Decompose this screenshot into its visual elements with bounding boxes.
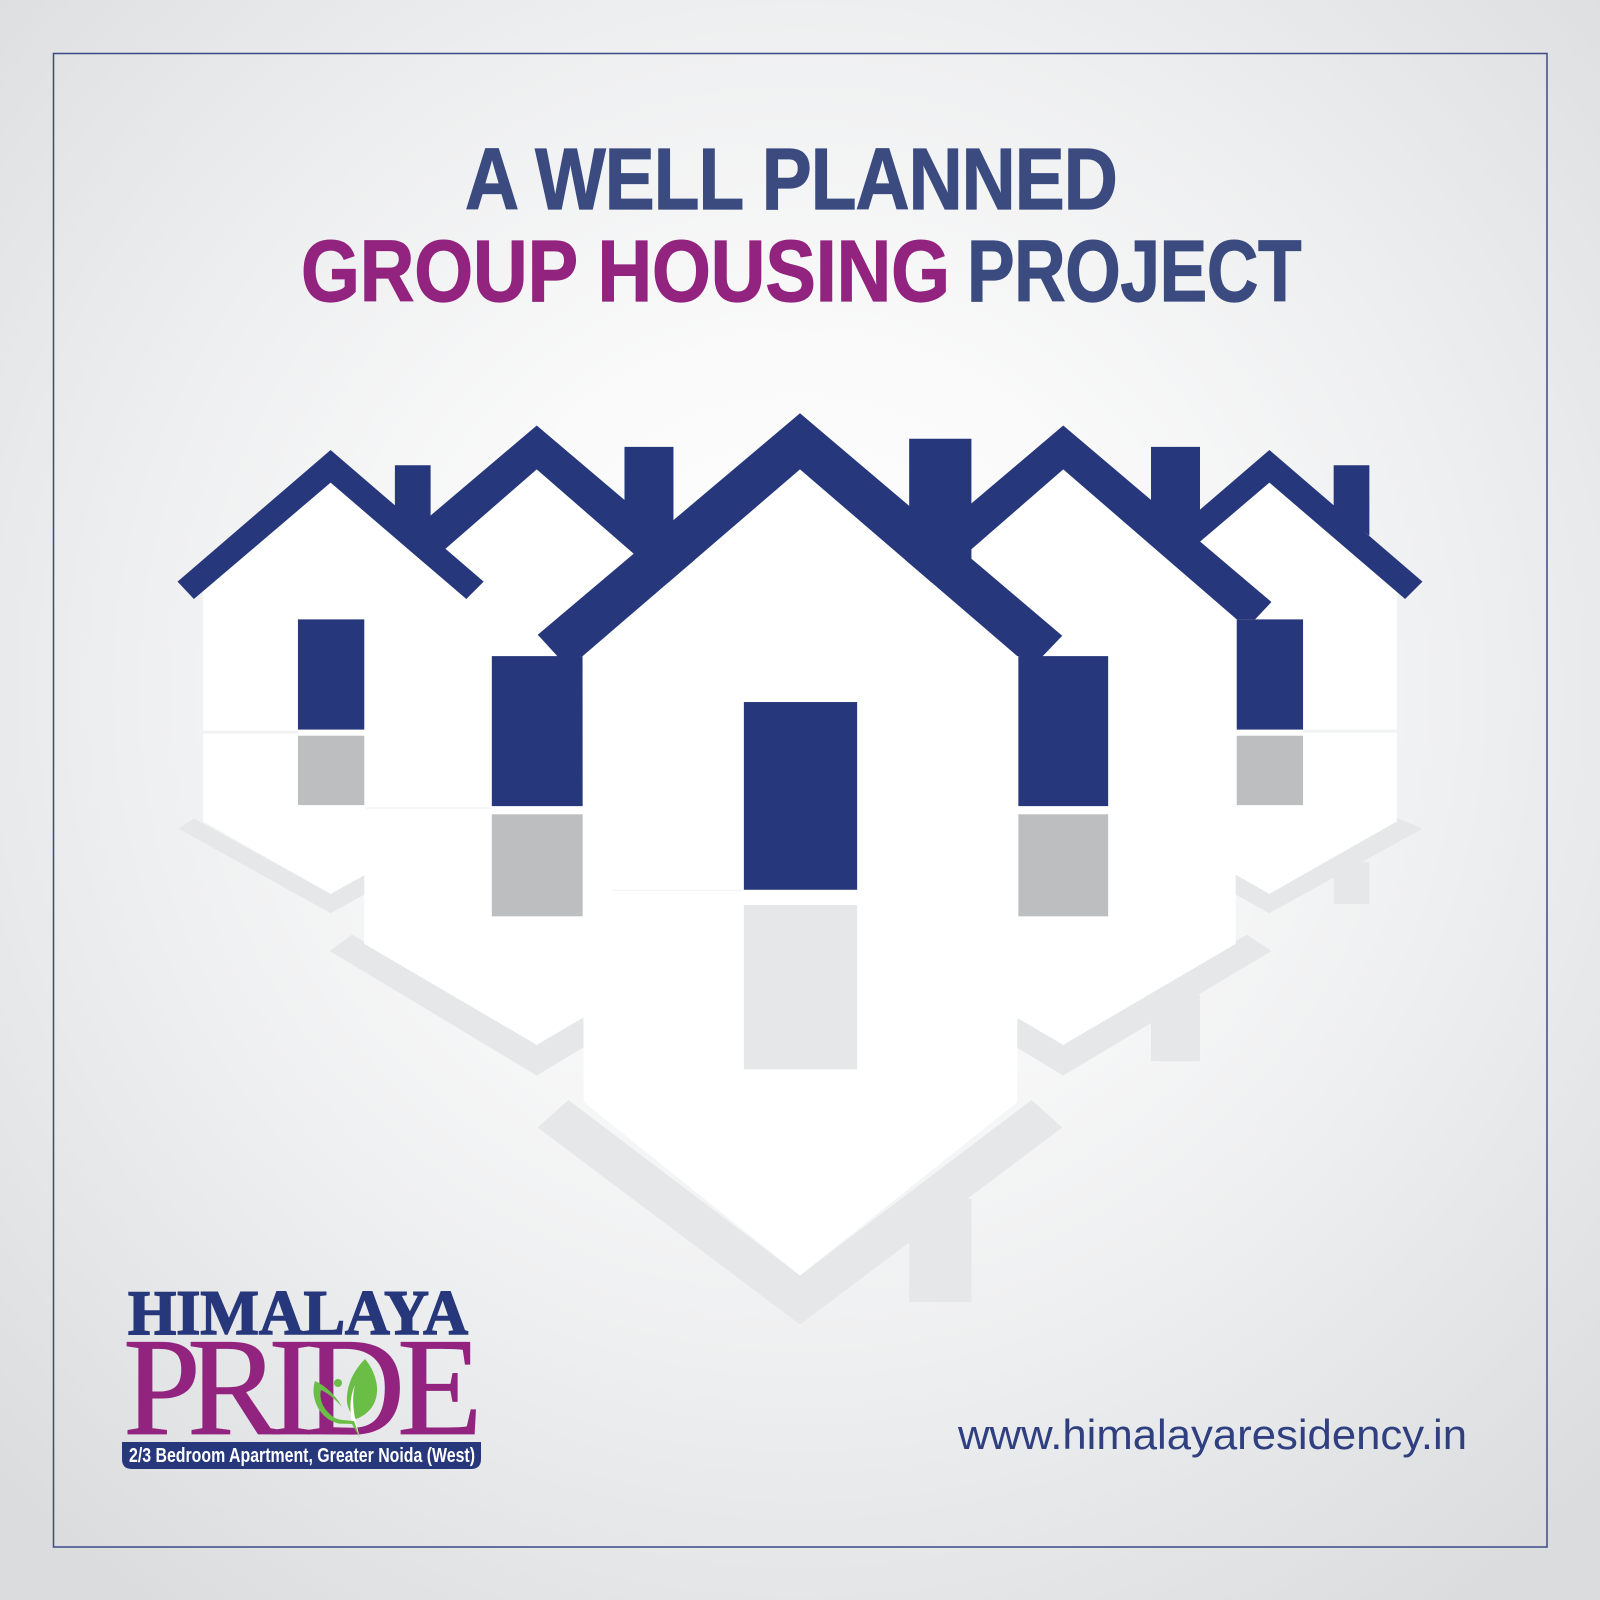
houses illustration <box>178 413 1422 1324</box>
back left house <box>329 426 745 1045</box>
logo word: PRIDE <box>123 1310 483 1465</box>
title line 1: A WELL PLANNED <box>465 132 1118 228</box>
logo tagline: 2/3 Bedroom Apartment, Greater Noida (West) <box>129 1445 475 1467</box>
website url: www.himalayaresidency.in <box>957 1411 1467 1458</box>
back right house <box>1116 450 1422 894</box>
title line 2 highlight: GROUP HOUSING <box>301 223 950 320</box>
logo tagline band <box>122 1442 481 1469</box>
central house <box>538 413 1062 1276</box>
reflected roof shadows <box>179 818 1422 1324</box>
title <box>301 132 1302 320</box>
logo name: HIMALAYA <box>128 1277 468 1348</box>
right large house <box>855 426 1271 1045</box>
logo <box>122 1277 483 1469</box>
front left house <box>178 450 484 894</box>
logo leaf <box>314 1359 377 1438</box>
title line 2 end: PROJECT <box>967 222 1302 320</box>
